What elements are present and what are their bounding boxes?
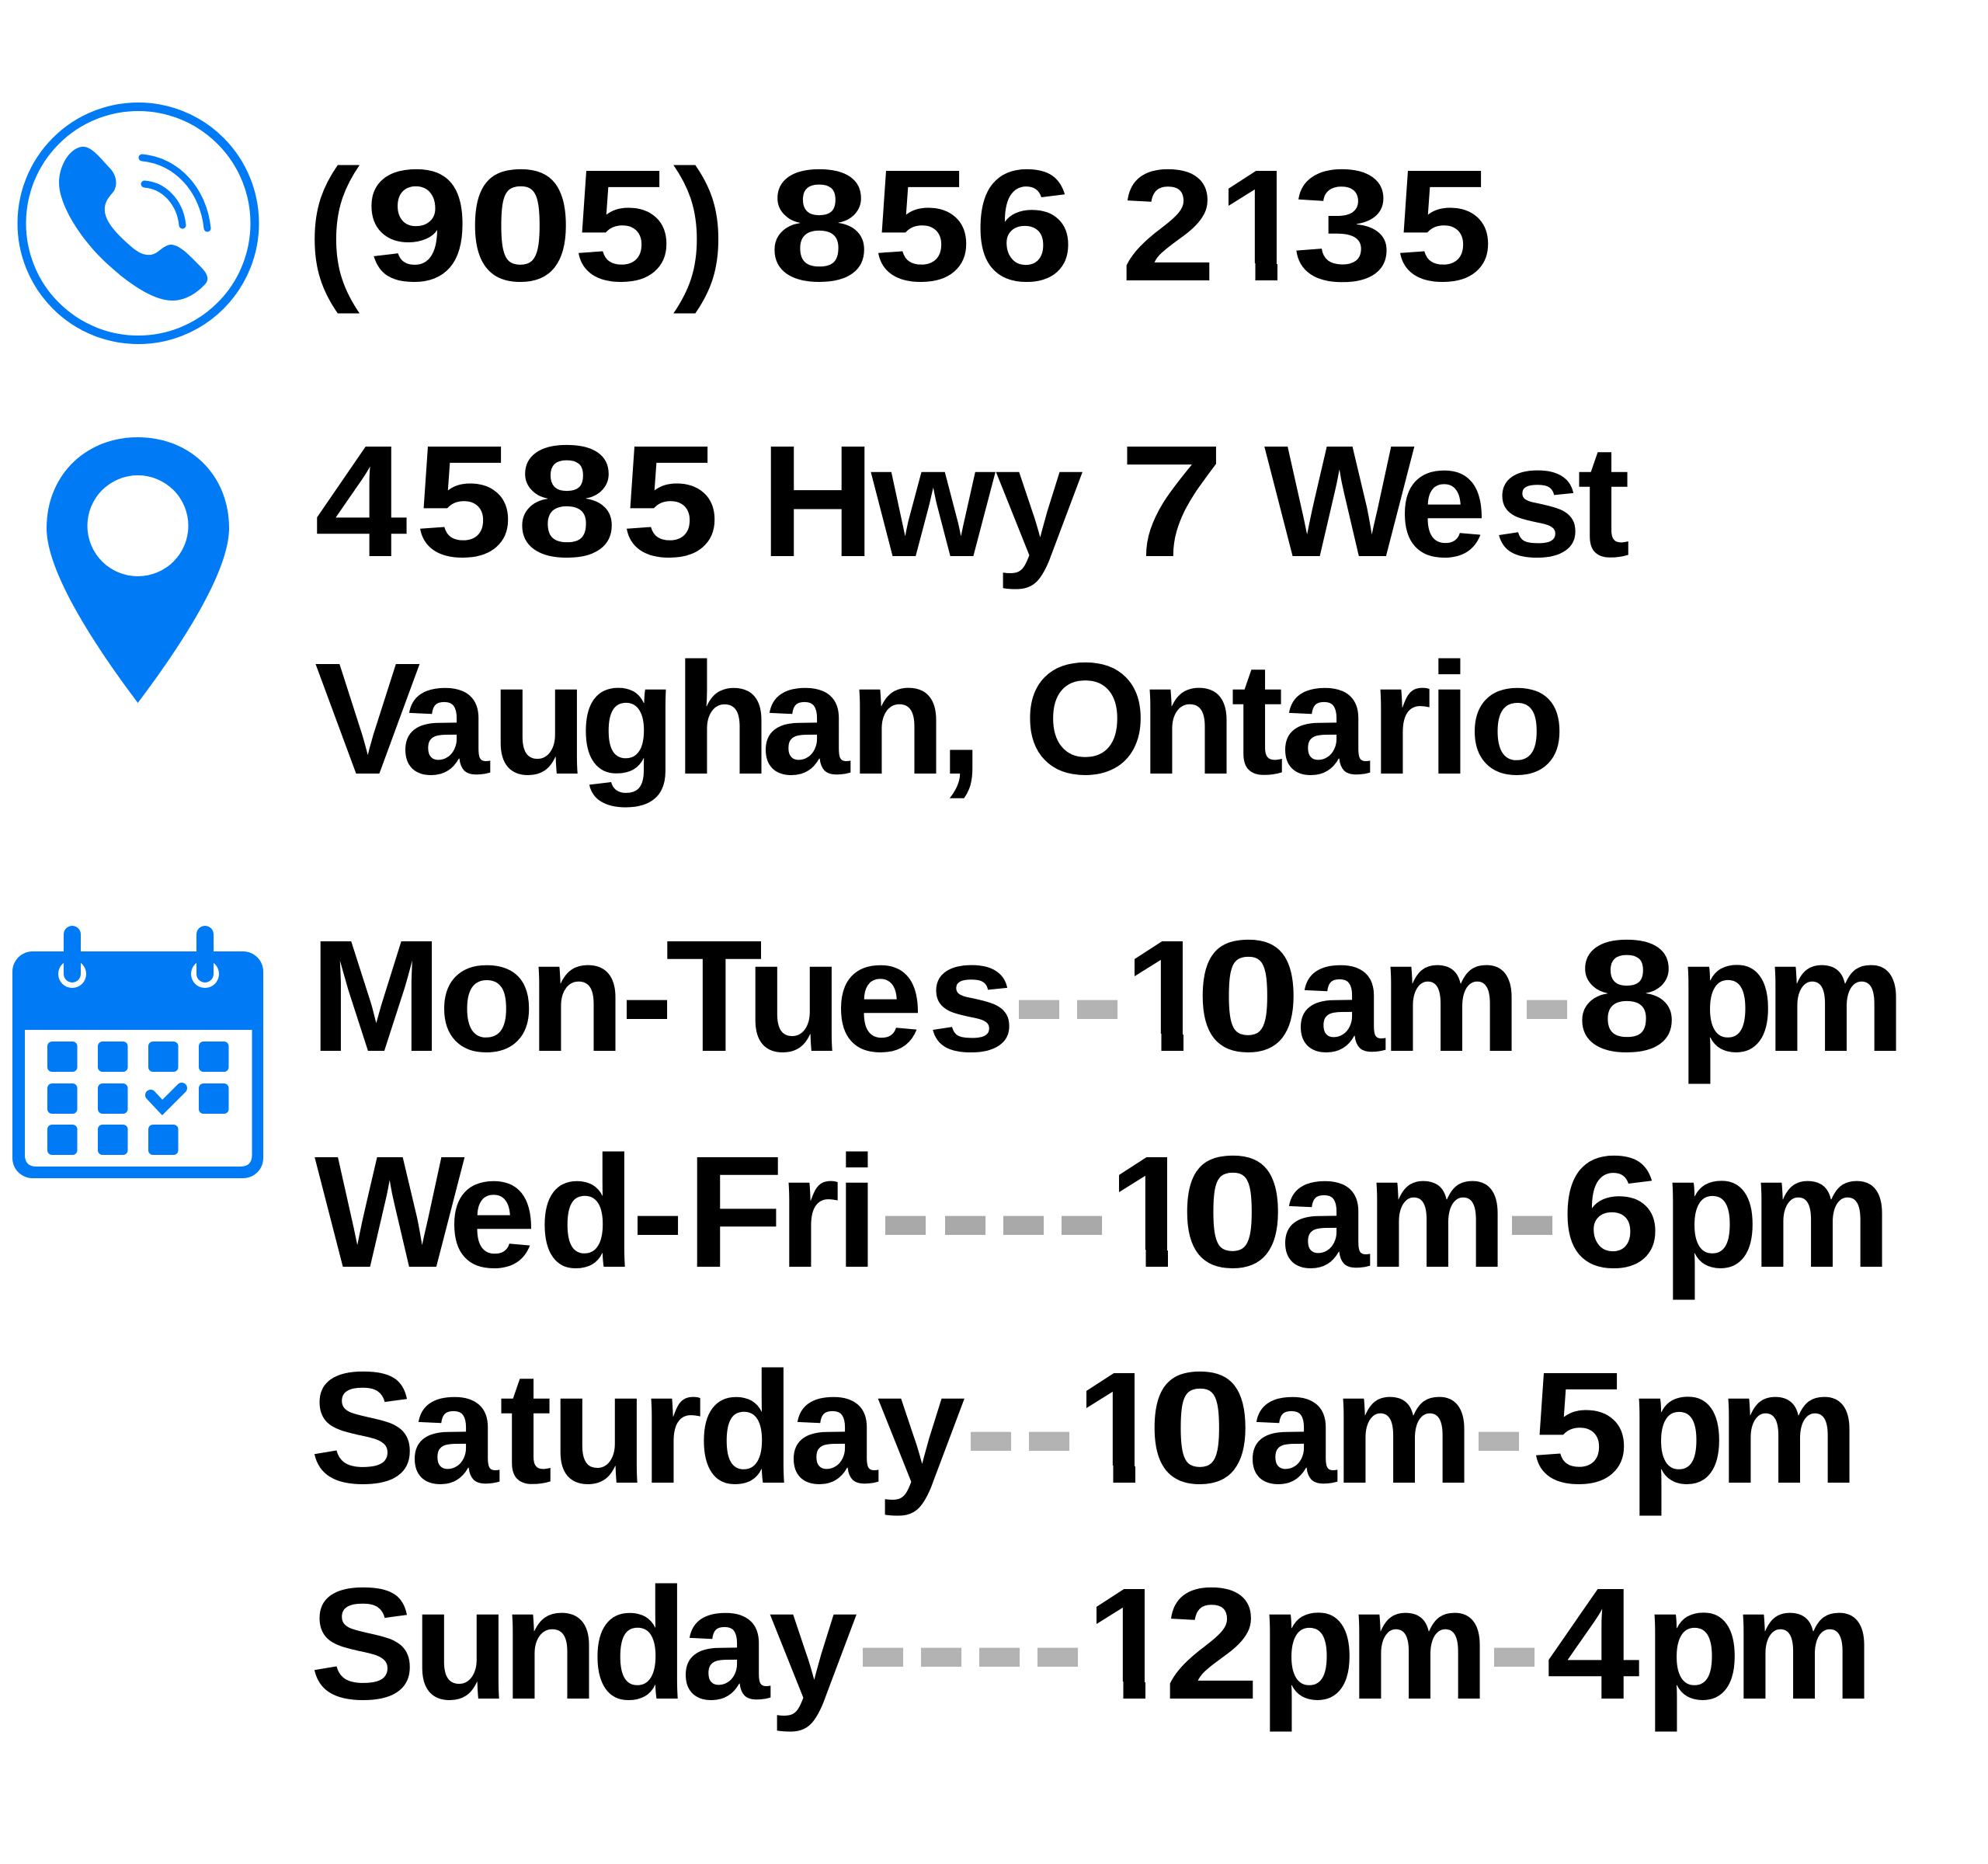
phone number: 8: [769, 136, 870, 315]
phone number: ): [673, 137, 726, 315]
icon: phone in circle: [22, 107, 255, 340]
panel: phone row: [22, 107, 1493, 340]
hours: Monday to Tuesday: 8: [1576, 906, 1677, 1085]
phone number: 9: [365, 136, 470, 315]
address line 1: 5: [415, 412, 513, 590]
hours: Saturday: Saturday: [310, 1339, 965, 1517]
phone number: 5: [573, 136, 672, 315]
hours: Monday to Tuesday: [310, 906, 1906, 1085]
hours: Wednesday to Friday: ----: [879, 1123, 1108, 1301]
phone number: 1: [1218, 137, 1306, 315]
hours: Sunday: ----: [857, 1555, 1084, 1733]
panel: opening hours: [12, 906, 1906, 1733]
hours: Wednesday to Friday: [315, 1122, 1892, 1301]
phone number: 3: [1292, 136, 1393, 315]
hours: Wednesday to Friday: 1: [1108, 1123, 1197, 1301]
hours: Monday to Tuesday: Mon-Tues: [310, 907, 1016, 1085]
phone number: 2: [1121, 137, 1216, 315]
hours: Sunday: Sunday: [310, 1555, 857, 1733]
hours: Sunday: 2: [1164, 1556, 1260, 1733]
hours: Saturday: 5: [1531, 1338, 1629, 1517]
hours: Saturday: 1: [1076, 1339, 1164, 1517]
address line 2: Vaughan, Ontario: [315, 630, 1566, 808]
hours: Sunday: pm: [1644, 1555, 1874, 1733]
address line 1: 7: [1119, 412, 1225, 590]
address line 1: 8: [516, 412, 617, 590]
hours: Saturday: am: [1248, 1339, 1474, 1517]
phone number: 0: [467, 136, 574, 314]
address line 1: West: [1264, 412, 1630, 590]
hours: Saturday: [310, 1338, 1859, 1517]
hours: Monday to Tuesday: 1: [1124, 907, 1212, 1085]
hours: Monday to Tuesday: pm: [1677, 907, 1906, 1085]
phone number: 5: [1395, 136, 1493, 315]
icon: map pin: [47, 437, 229, 703]
address line 1: Hwy: [760, 412, 1083, 590]
panel: address row: [47, 412, 1630, 808]
hours: Sunday: -: [1488, 1555, 1541, 1733]
hours: Monday to Tuesday: am: [1296, 907, 1521, 1085]
hours: Wednesday to Friday: -: [1506, 1123, 1559, 1301]
hours: Saturday: 0: [1147, 1338, 1253, 1516]
hours: Sunday: [310, 1555, 1874, 1733]
hours: Wednesday to Friday: pm: [1662, 1123, 1892, 1301]
hours: Saturday: --: [964, 1339, 1076, 1517]
hours: Sunday: pm: [1259, 1555, 1489, 1733]
address line 1: [315, 412, 1630, 590]
hours: Sunday: 1: [1086, 1555, 1174, 1733]
hours: Monday to Tuesday: --: [1013, 907, 1124, 1085]
hours: Monday to Tuesday: -: [1521, 907, 1573, 1085]
phone number: 5: [873, 136, 971, 315]
hours: Sunday: 4: [1546, 1555, 1640, 1733]
icon: calendar: [12, 926, 263, 1178]
hours: Saturday: -: [1472, 1339, 1525, 1517]
hours: Monday to Tuesday: 0: [1195, 906, 1302, 1084]
hours: Wednesday to Friday: Wed-Fri: [315, 1123, 879, 1301]
hours: Wednesday to Friday: 6: [1561, 1122, 1662, 1301]
hours: Wednesday to Friday: am: [1281, 1123, 1507, 1301]
hours: Wednesday to Friday: 0: [1180, 1122, 1286, 1300]
hours: Saturday: pm: [1628, 1339, 1859, 1517]
phone number: [307, 136, 1493, 315]
address line 1: 4: [315, 412, 408, 590]
phone number: (: [307, 137, 360, 315]
address line 1: 5: [621, 412, 720, 590]
phone number: 6: [974, 136, 1075, 315]
